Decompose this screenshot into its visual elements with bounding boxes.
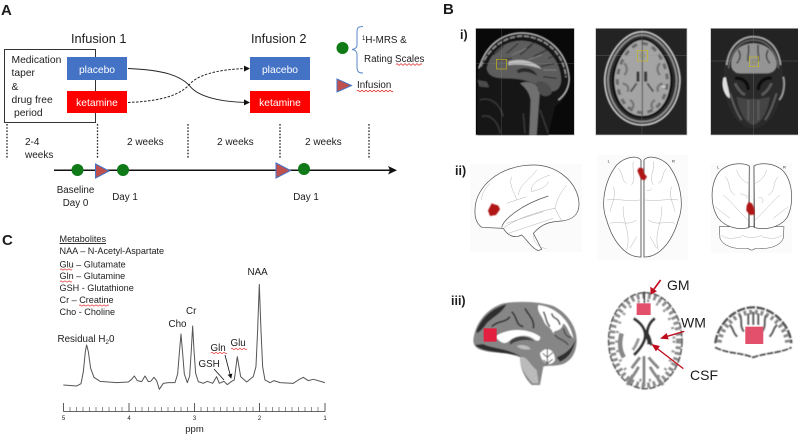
dotted time dividers <box>7 124 369 158</box>
timeline labels: Day 1 <box>112 192 138 203</box>
MRI coronal <box>711 28 798 135</box>
segmented coronal <box>713 305 793 358</box>
crossover arrow: ketamine to placebo <box>128 68 249 102</box>
legend: 1H-MRS and rating scales <box>336 26 425 73</box>
MRI row i <box>476 28 798 135</box>
panel label A: A <box>1 2 12 19</box>
metabolite list: Gln – Glutamine <box>60 271 125 281</box>
ppm axis: 4 <box>127 416 131 422</box>
segmented brain row iii <box>473 280 793 390</box>
timeline markers <box>72 163 310 178</box>
placebo box, infusion 2: placebo <box>262 65 298 76</box>
glass brain sagittal <box>470 164 582 252</box>
spectrum trace <box>63 284 325 389</box>
medication taper box: period <box>14 108 43 119</box>
arrow to WM <box>660 331 684 339</box>
legend: 1H-MRS and rating scales: Rating Scales <box>364 54 425 65</box>
placebo box, infusion 1 <box>67 57 127 80</box>
peak labels: 0 <box>109 334 115 345</box>
medication taper box: drug free <box>12 95 53 106</box>
legend: infusion <box>337 79 393 92</box>
peak labels: Cho <box>168 319 187 330</box>
duration labels <box>24 137 342 161</box>
ppm axis: 5 <box>62 416 66 422</box>
timeline labels: Baseline <box>57 185 95 196</box>
medication taper box: & <box>12 82 18 93</box>
glass brain axial: R <box>672 159 675 164</box>
peak labels: GSH <box>198 359 220 370</box>
arrow to GM <box>650 280 661 295</box>
ketamine box, infusion 1: ketamine <box>76 98 118 109</box>
peak labels: Gln <box>210 343 226 354</box>
label ii): ii) <box>455 164 466 178</box>
panel: A study design <box>1 2 425 209</box>
timeline arrow <box>54 166 397 174</box>
legend: 1H-MRS and rating scales: 1 <box>362 36 366 42</box>
duration labels: 2 weeks <box>217 137 254 148</box>
duration labels: weeks <box>24 150 53 161</box>
glass brain coronal: L <box>717 165 720 170</box>
MRI sagittal <box>476 28 574 135</box>
panel: C spectrum <box>2 232 327 435</box>
metabolite list: Cr – Creatine <box>60 295 114 305</box>
metabolite list: GSH - Glutathione <box>60 283 134 293</box>
glass brain row ii <box>470 155 792 260</box>
duration labels: 2 weeks <box>127 137 164 148</box>
label WM: WM <box>681 314 706 330</box>
crossover arrow: placebo to ketamine <box>128 68 249 102</box>
metabolite list: Metabolites <box>60 234 106 244</box>
peak labels: Cr <box>186 306 197 317</box>
glass brain coronal: R <box>783 165 786 170</box>
panel label C: C <box>2 232 13 249</box>
label iii): iii) <box>451 294 466 308</box>
label CSF: CSF <box>690 367 718 383</box>
duration labels: 2-4 <box>25 137 40 148</box>
legend: infusion: Infusion <box>357 80 391 91</box>
arrow to CSF <box>651 344 683 369</box>
timeline labels: Day 0 <box>63 198 89 209</box>
heading: Infusion 1: Infusion 1 <box>71 31 126 46</box>
glass brain coronal <box>711 163 792 253</box>
timeline labels: Day 1 <box>293 192 319 203</box>
metabolite list: Glu – Glutamate <box>60 260 126 270</box>
placebo box, infusion 1: placebo <box>79 65 115 76</box>
ppm axis <box>62 403 327 435</box>
peak labels: Glu <box>230 338 246 349</box>
medication taper box <box>4 50 96 122</box>
ketamine box, infusion 2 <box>250 91 310 113</box>
segmented sagittal <box>473 302 577 385</box>
glass brain axial: L <box>608 159 611 164</box>
peak labels <box>58 267 268 370</box>
metabolite list: NAA – N-Acetyl-Aspartate <box>60 246 164 256</box>
panel label B: B <box>443 1 454 18</box>
ppm axis: 1 <box>323 416 327 422</box>
timeline labels <box>57 185 319 209</box>
duration labels: 2 weeks <box>305 137 342 148</box>
legend: 1H-MRS and rating scales: H-MRS & <box>365 35 407 46</box>
ppm axis: 2 <box>258 416 262 422</box>
panel: B imaging <box>443 1 798 390</box>
heading: Infusion 2: Infusion 2 <box>251 31 306 46</box>
medication taper box: taper <box>12 68 36 79</box>
peak labels: 2 <box>105 339 109 346</box>
medication taper box: Medication <box>12 55 62 66</box>
glass brain axial <box>597 155 688 260</box>
ppm axis: 3 <box>193 416 197 422</box>
metabolite list: Cho - Choline <box>60 307 115 317</box>
label i): i) <box>460 28 468 42</box>
segmented axial <box>608 292 683 390</box>
peak arrows <box>214 355 231 380</box>
label GM: GM <box>667 277 690 293</box>
peak labels: NAA <box>248 267 268 278</box>
ketamine box, infusion 1 <box>67 91 127 113</box>
ppm axis: ppm <box>185 424 204 435</box>
ketamine box, infusion 2: ketamine <box>259 98 301 109</box>
MRI axial <box>596 28 687 135</box>
placebo box, infusion 2 <box>250 57 310 80</box>
peak labels: Residual H <box>58 334 105 345</box>
metabolite list <box>60 234 164 317</box>
